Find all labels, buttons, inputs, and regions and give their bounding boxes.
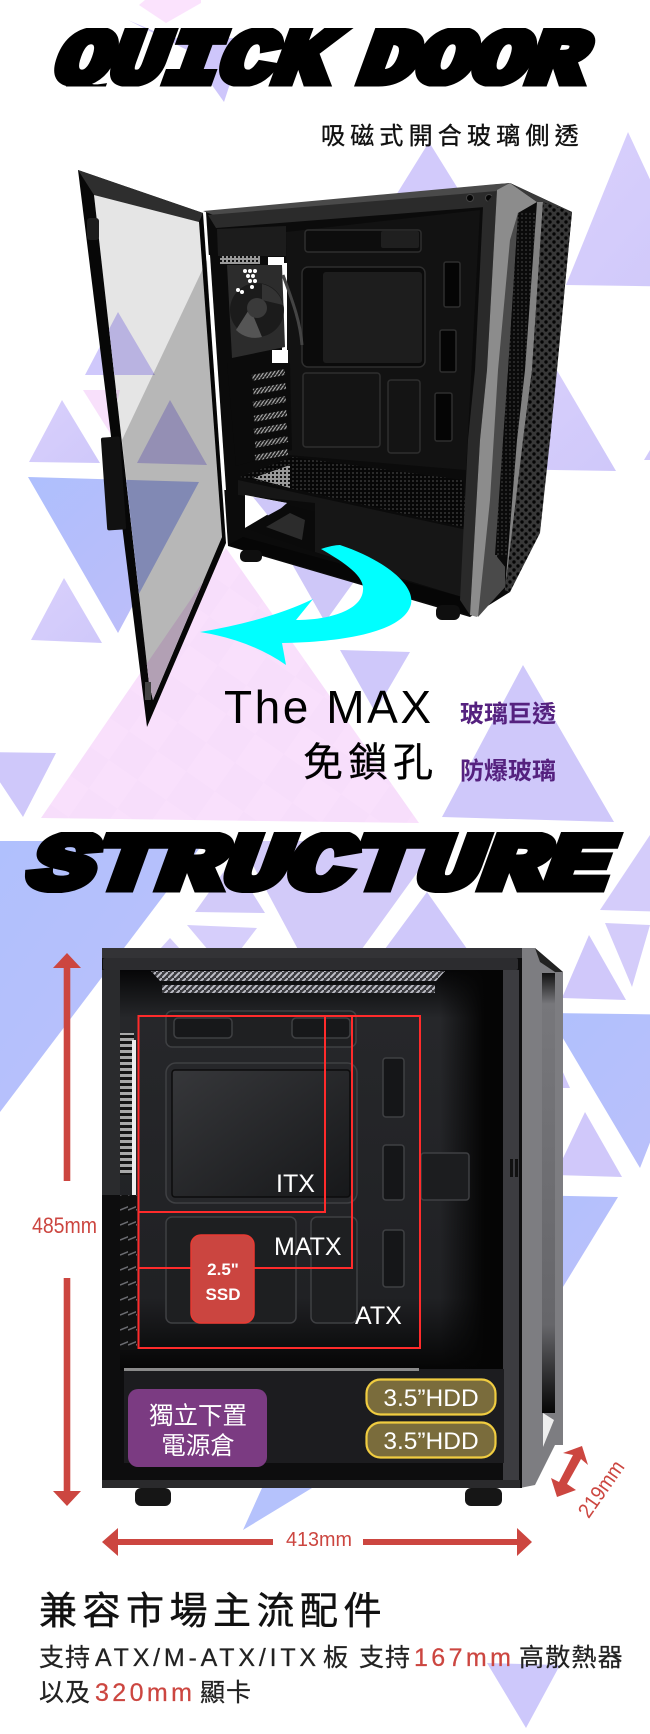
white gap beside door — [207, 255, 226, 490]
title: STRUCTURE: STRUCTURE — [15, 821, 628, 912]
second gray strip — [505, 202, 543, 592]
heading: mainstream parts compatibility: 兼容市場主流配件 — [39, 1591, 387, 1633]
background seen through glass — [109, 312, 207, 700]
title: QUICK DOOR — [54, 28, 596, 86]
front frame — [102, 948, 522, 1488]
side panel top — [510, 183, 572, 212]
label: MATX: MATX — [274, 1233, 342, 1261]
spec text line 1: 板 — [323, 1644, 348, 1672]
text: no-lock holes: 免鎖孔 — [303, 741, 438, 785]
case bottom rail — [228, 537, 470, 615]
spec text line 1: 支持 — [359, 1644, 411, 1672]
glass door — [78, 170, 226, 727]
badge: 3.5 inch HDD upper — [366, 1380, 496, 1414]
door latch — [145, 682, 151, 700]
rear ceiling — [217, 226, 286, 256]
subtitle: magnetic glass side panel: 吸磁式開合玻璃側透 — [321, 123, 584, 150]
side mesh panel — [505, 202, 572, 592]
psu bay — [245, 505, 315, 552]
badge: 2.5 inch SSD: 2.5" — [207, 1260, 239, 1279]
case top frame band — [208, 191, 497, 228]
pci slots — [227, 363, 292, 466]
psu shroud front — [238, 480, 467, 597]
label: 485mm: 485mm — [32, 1213, 97, 1238]
MATX frame — [138, 1016, 352, 1268]
label: ATX: ATX — [355, 1302, 402, 1330]
side vent strip — [542, 973, 555, 1413]
interior wall — [120, 970, 503, 1370]
label: 219mm: 219mm — [574, 1456, 629, 1522]
side latch — [510, 1159, 518, 1177]
badge: independent PSU chamber: 獨立下置 — [149, 1402, 247, 1430]
label: 413mm: 413mm — [286, 1529, 352, 1551]
width dimension arrow — [102, 1528, 532, 1556]
top mesh strips — [151, 971, 445, 993]
title: QUICK DOOR: DOOR — [347, 19, 603, 105]
bottom rail — [102, 1480, 520, 1488]
side top wedge — [535, 948, 563, 972]
title: QUICK DOOR: QUICK — [42, 19, 348, 105]
rear vent stripes — [120, 1033, 134, 1175]
spec text line 1: ATX/M-ATX/ITX — [95, 1644, 320, 1672]
psu shroud — [124, 1369, 504, 1463]
tag: large glass: 玻璃巨透 — [460, 701, 556, 728]
case top edge — [203, 183, 510, 216]
rear white openings — [268, 257, 288, 367]
rear perforation — [220, 256, 260, 264]
door handle — [101, 436, 126, 531]
rear white strip — [132, 1040, 136, 1200]
motherboard size frames — [138, 1016, 420, 1348]
height dimension arrow — [53, 953, 81, 1506]
gray front pillar — [470, 183, 537, 617]
badge: 3.5 inch HDD upper: 3.5”HDD — [383, 1385, 479, 1412]
lower opening — [245, 495, 287, 528]
left back column — [102, 970, 120, 1195]
badge: 2.5 inch SSD — [191, 1235, 254, 1323]
pillar shaded band — [478, 213, 518, 617]
spec text line 2: 以及 — [39, 1679, 91, 1707]
door glass base — [94, 195, 222, 700]
case back wall — [286, 210, 480, 470]
right frame strip — [503, 970, 519, 1480]
badge: independent PSU chamber: 電源倉 — [161, 1432, 235, 1460]
pci slots — [120, 1195, 137, 1350]
motherboard tray — [166, 1011, 469, 1323]
badge: 3.5 inch HDD lower — [366, 1422, 496, 1458]
dark frame strip — [460, 190, 497, 615]
open case with magnetic door — [78, 170, 572, 727]
tag: tempered glass: 防爆玻璃 — [460, 758, 556, 785]
darker glass reflection — [122, 260, 222, 700]
side white notch — [543, 1413, 554, 1447]
side pillar — [520, 948, 563, 1488]
feet — [135, 1488, 502, 1506]
spec text line 1: 支持 — [39, 1644, 91, 1672]
badge: 2.5 inch SSD: SSD — [206, 1285, 240, 1304]
psu shroud mesh shelf — [240, 457, 467, 528]
front view case with compatibility overlays — [102, 948, 563, 1506]
label: ITX: ITX — [276, 1170, 315, 1198]
spec text line 1: 高散熱器 — [519, 1644, 624, 1672]
glass tint — [94, 195, 222, 700]
depth dimension arrow — [551, 1446, 588, 1497]
internal cable — [283, 275, 302, 345]
rear fan — [227, 265, 285, 358]
spec text line 1: 167mm — [414, 1644, 514, 1672]
spec text line 2: 顯卡 — [200, 1679, 252, 1707]
spec text line 2: 320mm — [95, 1679, 195, 1707]
case front feet — [240, 550, 460, 620]
text: The MAX: The MAX — [224, 681, 431, 733]
case body — [206, 183, 572, 617]
shroud highlight — [124, 1368, 419, 1371]
top screws — [466, 194, 492, 202]
top frame band — [102, 948, 522, 958]
ITX frame — [138, 1016, 325, 1212]
door hinge — [87, 218, 99, 240]
badge: independent PSU chamber — [128, 1389, 267, 1467]
cyan door-swing arrow — [200, 545, 411, 665]
motherboard tray cutouts — [302, 230, 460, 453]
door frame — [78, 170, 226, 727]
interior right fade — [440, 970, 503, 1370]
ATX frame — [138, 1016, 420, 1348]
side black slot — [495, 213, 536, 555]
badge: 3.5 inch HDD lower: 3.5”HDD — [383, 1428, 479, 1455]
